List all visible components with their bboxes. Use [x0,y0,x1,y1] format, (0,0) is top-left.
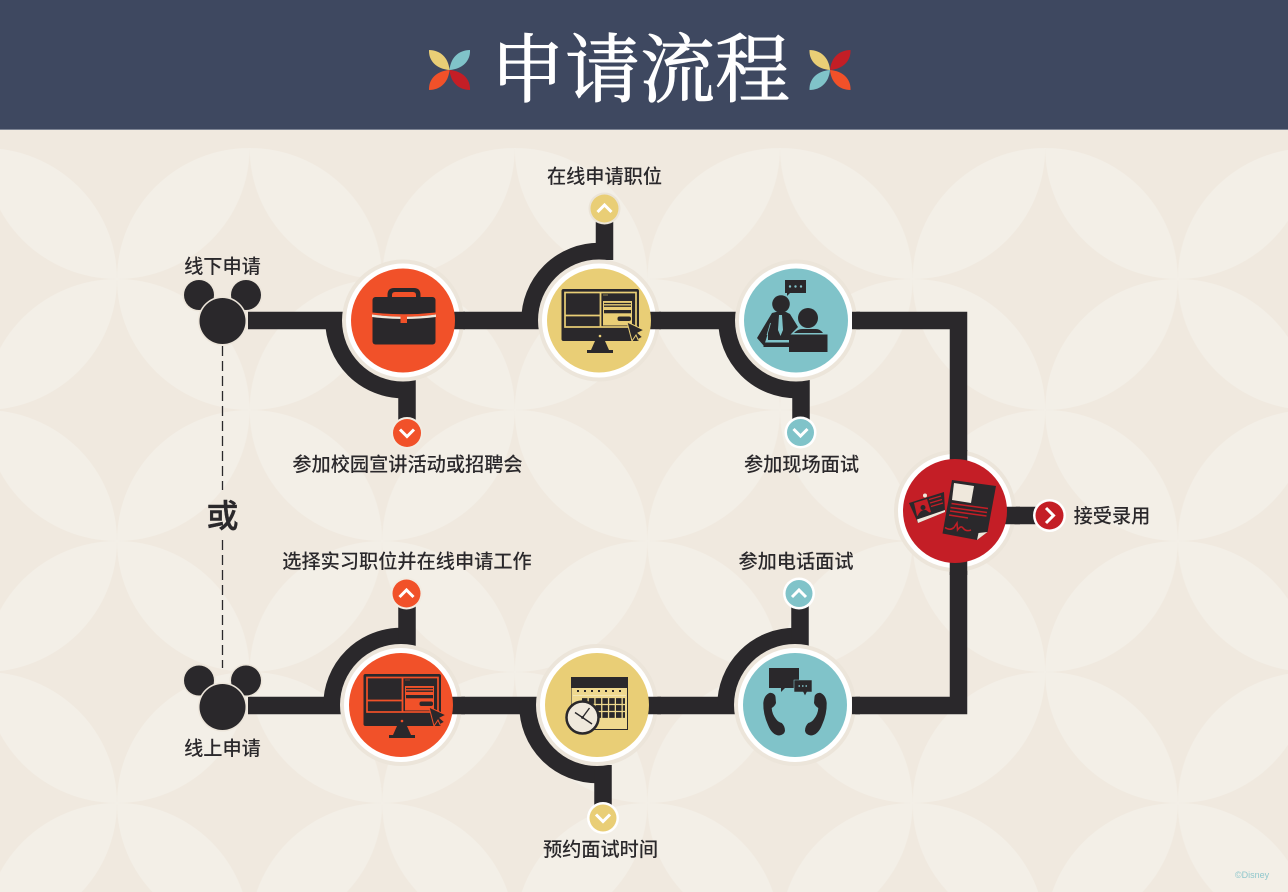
step: schedule interview [536,644,661,766]
icon: right pinwheel [809,50,851,90]
marker: internship up [390,578,422,610]
marker: phone interview up [783,578,815,610]
icon: calendar and clock [566,677,628,734]
label: online apply: 在线申请职位 [547,166,662,188]
marker: schedule interview down [587,802,619,834]
marker: online application up [588,192,620,224]
dashed connector [222,346,224,668]
label: or: 或 [206,498,239,534]
copyright: ©Disney [1235,870,1270,880]
title: 申请流程 [490,30,790,113]
marker: onsite interview down [784,416,816,448]
icon: monitor orange [364,674,446,738]
process track [248,220,1040,806]
icon: mouse start bottom [184,666,261,730]
icon: phones and bubbles [763,668,827,736]
label: phone interview: 参加电话面试 [738,551,854,573]
label: accept offer: 接受录用 [1074,506,1150,528]
marker: accept offer right [1033,499,1066,532]
icon: briefcase [372,288,436,344]
icon: interview [757,280,828,352]
step: onsite interview [735,260,860,382]
icon: documents [909,480,996,540]
icon: left pinwheel [429,50,470,90]
header band [0,0,1288,130]
step: offer [894,450,1020,575]
label: online: 线上申请 [184,738,261,760]
icon: monitor [562,289,644,353]
label: internship: 选择实习职位并在线申请工作 [282,551,532,573]
step: phone interview [734,644,860,766]
icon: mouse start top [184,280,261,344]
marker: campus events down [391,417,423,449]
label: schedule interview: 预约面试时间 [543,839,658,861]
label: campus events: 参加校园宣讲活动或招聘会 [292,454,523,476]
label: onsite interview: 参加现场面试 [744,454,859,476]
step: campus events [342,260,465,382]
step: online application [538,260,661,382]
step: online internship [340,644,465,766]
label: offline: 线下申请 [184,256,261,278]
